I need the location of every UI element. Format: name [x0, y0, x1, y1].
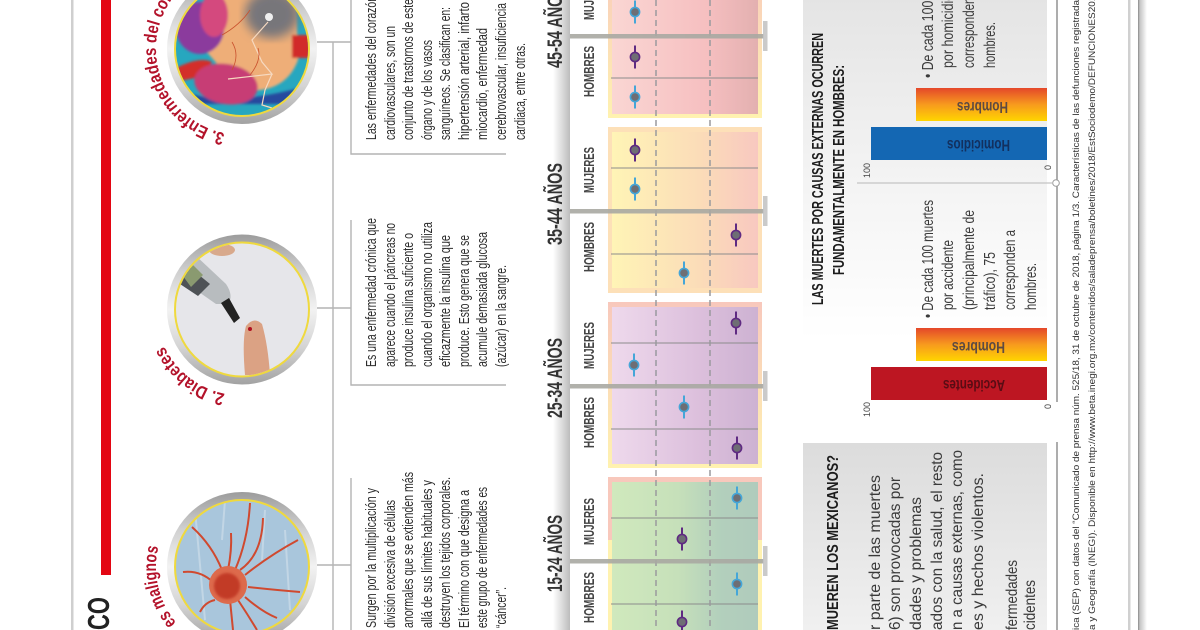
shaded band behind age axis	[553, 0, 570, 630]
panel: age 25-34	[608, 302, 762, 468]
text: accidents note: tráfico), 75	[982, 252, 999, 310]
source note: ica (SEP) con datos del “Comunicado de prensa núm. 525/18, 31 de octubre de 2018, página 1/3. Características de las defunciones registradas	[1071, 0, 1082, 630]
panel: age 35-44	[608, 127, 762, 293]
legend: causes: fermedades	[1004, 560, 1021, 630]
sex labels	[581, 0, 598, 623]
text: diabetes description: acumule demasiada glucosa	[475, 231, 491, 367]
icon: tumor circle	[167, 492, 317, 630]
icon: diabetes circle	[167, 234, 317, 384]
text: accidents note: corresponden a	[1002, 230, 1019, 310]
text: why Mexicans die body	[867, 450, 987, 630]
bar chart: homicides: 100	[862, 163, 872, 178]
text: diabetes description: Es una enfermedad crónica que	[364, 218, 380, 367]
bar chart: accidents	[862, 328, 1053, 417]
text: accidents note	[920, 200, 1040, 318]
text: heart diseases description	[364, 0, 529, 140]
age labels: 35-44 AÑOS	[544, 163, 567, 245]
text: accidents note: por accidente	[940, 240, 957, 310]
age labels: 25-34 AÑOS	[544, 338, 567, 418]
panel: external causes	[803, 0, 1047, 340]
text: why Mexicans die body: r parte de las muertes	[867, 475, 884, 630]
text: why Mexicans die body: 6) son provocadas por	[887, 477, 904, 630]
icon: heart circle	[167, 0, 317, 124]
text: diabetes description: produce. Esto genera que se	[457, 235, 473, 367]
text: tumors description: este grupo de enfermedades es	[475, 487, 491, 628]
text: heart diseases description: cardiaca, entre otras.	[513, 43, 529, 140]
sex labels: HOMBRES	[581, 222, 598, 272]
text: tumors description: destruyen los tejidos corporales.	[438, 477, 454, 628]
source note: a y Geografía (INEGI). Disponible en http://www.beta.inegi.org.mx/contenidos/saladeprensa/boletines/2018/EstSociodemo/DEFUNCIONES2018	[1087, 0, 1098, 630]
panel: why Mexicans die	[803, 443, 1047, 630]
page border right	[1128, 0, 1147, 630]
heading: external causes	[810, 33, 848, 305]
text: diabetes description: aparece cuando el páncreas no	[383, 223, 399, 367]
bar chart: accidents: 0	[1043, 404, 1053, 409]
axis lines	[857, 0, 1059, 630]
title fragment: CO	[81, 597, 116, 630]
text: why Mexicans die body: ados con la salud, el resto	[929, 452, 946, 630]
red title bar	[101, 0, 111, 575]
sex labels: MUJERES	[581, 147, 598, 193]
bar chart: accidents: Accidentes	[943, 376, 1005, 393]
age axis bars	[570, 21, 768, 576]
text: diabetes description: (azúcar) en la sangre.	[494, 265, 510, 367]
heading: why Mexicans die: MUEREN LOS MEXICANOS?	[825, 455, 842, 630]
connector lines	[317, 0, 506, 630]
text: why Mexicans die body: es y hechos violentos.	[970, 473, 987, 630]
label: Tumores malignos: es malignos	[144, 546, 175, 627]
text: accidents note: (principalmente de	[961, 210, 978, 310]
text: diabetes description	[364, 218, 510, 367]
text: tumors description	[364, 472, 510, 628]
text: diabetes description: cuando el organismo no utiliza	[420, 221, 436, 367]
text: heart diseases description: órgano y de los vasos	[420, 40, 436, 140]
text: tumors description: división excesiva de células	[383, 500, 399, 628]
age labels: 15-24 AÑOS	[544, 515, 567, 592]
bar chart: accidents: Hombres	[952, 338, 1005, 355]
legend: causes	[1004, 560, 1039, 630]
sex labels: MUJERES	[581, 322, 598, 369]
bar chart: homicides: Hombres	[957, 98, 1008, 115]
text: tumors description: anormales que se extienden más	[401, 472, 417, 628]
text: homicides note	[920, 0, 999, 78]
page border left	[71, 0, 74, 630]
text: why Mexicans die body: n a causas externas, como	[949, 450, 966, 630]
text: homicides note: hombres.	[982, 22, 999, 68]
text: tumors description: allá de sus límites habituales y	[420, 479, 436, 628]
bar chart: homicides: Homicidios	[947, 136, 1010, 153]
text: diabetes description: eficazmente la insulina que	[438, 235, 454, 367]
text: diabetes description: produce insulina suficiente o	[401, 233, 417, 367]
bar chart: accidents: 100	[862, 402, 872, 417]
text: tumors description: Surgen por la multiplicación y	[364, 487, 380, 628]
sex labels: HOMBRES	[581, 572, 598, 623]
text: accidents note: • De cada 100 muertes	[920, 200, 937, 318]
panel: age 45-54	[608, 0, 762, 118]
text: tumors description: El término con que designa a	[457, 489, 473, 628]
data markers	[629, 0, 742, 630]
panel: age 15-24	[608, 477, 762, 630]
label: Diabetes: 2. Diabetes	[156, 348, 224, 406]
bar chart: homicides: 0	[1043, 165, 1053, 170]
text: accidents note: hombres.	[1023, 263, 1040, 310]
bar chart: homicides	[862, 88, 1053, 178]
sex labels: HOMBRES	[581, 397, 598, 448]
age labels	[544, 0, 567, 592]
text: tumors description: “cáncer”.	[494, 587, 510, 628]
source note	[1071, 0, 1098, 630]
text: why Mexicans die body: dades y problemas	[908, 497, 925, 630]
sex labels: MUJERES	[581, 498, 598, 545]
legend: causes: cidentes	[1022, 580, 1039, 630]
sex labels: HOMBRES	[581, 46, 598, 97]
